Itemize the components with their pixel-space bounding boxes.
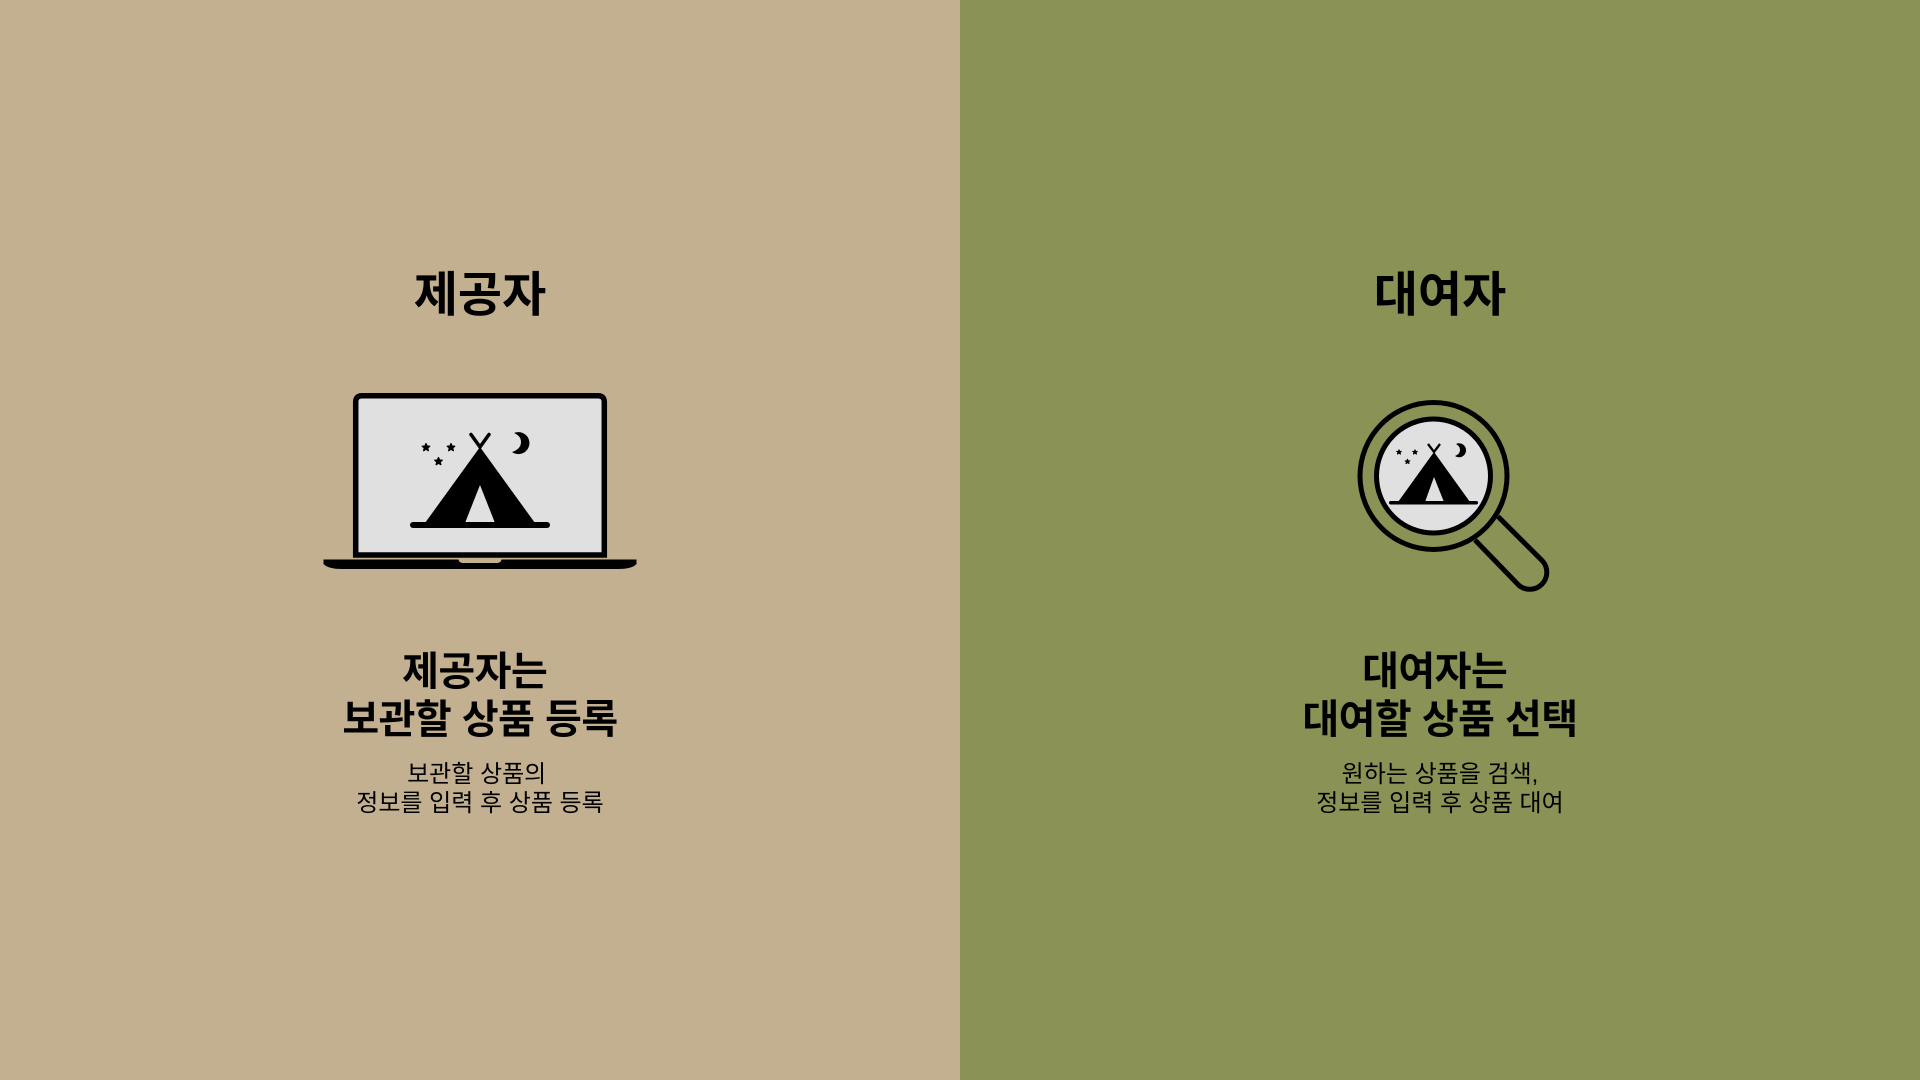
heading: provider step: 제공자는 보관할 상품 등록 xyxy=(342,650,618,742)
heading: borrower step: 대여자는 대여할 상품 선택 xyxy=(1302,650,1578,742)
panel: borrower xyxy=(960,0,1920,1080)
icon: magnifier with tent xyxy=(1358,400,1550,592)
title: provider: 제공자 xyxy=(414,269,546,322)
text: borrower description: 원하는 상품을 검색, 정보를 입력 후 상품 대여 xyxy=(1316,761,1564,817)
text: provider description: 보관할 상품의 정보를 입력 후 상품 등록 xyxy=(356,761,604,817)
panel: provider xyxy=(0,0,960,1080)
title: borrower: 대여자 xyxy=(1374,269,1506,322)
icon: laptop with tent xyxy=(324,393,636,569)
